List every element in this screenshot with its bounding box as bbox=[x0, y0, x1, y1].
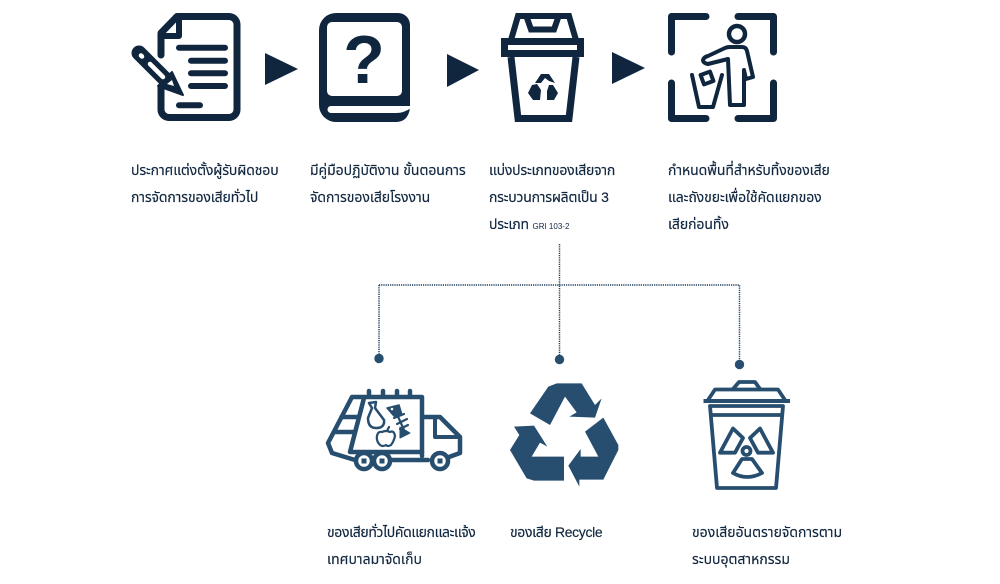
text: general waste bbox=[327, 524, 476, 567]
text: step 1 announcement: การจัดการของเสียทั่วไป bbox=[131, 189, 258, 205]
marker: general waste dot bbox=[374, 354, 384, 363]
text: step 4 designated area bbox=[668, 160, 830, 232]
connector: dotted tree bbox=[379, 244, 740, 364]
marker: hazardous dot bbox=[735, 360, 744, 369]
icon: manual book with question mark bbox=[319, 13, 411, 122]
text: step 4 designated area: และถังขยะเพื่อใช้คัดแยกของ bbox=[668, 189, 822, 205]
text: step 2 manual: มีคู่มือปฏิบัติงาน ขั้นตอนการ bbox=[310, 162, 466, 178]
text: step 3 classify: กระบวนการผลิตเป็น 3 bbox=[489, 189, 609, 205]
arrow: step 3 to 4 bbox=[612, 52, 645, 84]
text: general waste: เทศบาลมาจัดเก็บ bbox=[327, 551, 422, 567]
text: step 3 classify: ประเภท GRI 103-2 bbox=[489, 216, 569, 232]
arrow: step 2 to 3 bbox=[447, 54, 479, 87]
icon: document and pencil bbox=[139, 16, 237, 118]
marker: recycle dot bbox=[555, 355, 564, 364]
text: step 1 announcement bbox=[131, 162, 279, 205]
arrow: step 1 to 2 bbox=[265, 53, 298, 85]
text: step 3 classify: แบ่งประเภทของเสียจาก bbox=[489, 162, 615, 178]
text: hazardous waste: ระบบอุตสาหกรรม bbox=[692, 551, 790, 567]
text: hazardous waste: ของเสียอันตรายจัดการตาม bbox=[692, 524, 842, 540]
text: hazardous waste bbox=[692, 524, 842, 568]
text: step 4 designated area: เสียก่อนทิ้ง bbox=[668, 216, 729, 232]
icon: large recycle symbol bbox=[510, 383, 618, 487]
icon: manual book with question mark: ? bbox=[343, 22, 385, 98]
text: step 4 designated area: กำหนดพื้นที่สำหรับทิ้งของเสีย bbox=[668, 162, 830, 178]
icon: person throwing trash in frame bbox=[672, 16, 774, 118]
text: general waste: ของเสียทั่วไปคัดแยกและแจ้ง bbox=[327, 524, 475, 540]
icon: recycling bin bbox=[504, 16, 580, 118]
icon: garbage truck with food waste bbox=[328, 391, 460, 469]
text: step 1 announcement: ประกาศแต่งตั้งผู้รับผิดชอบ bbox=[131, 162, 279, 178]
text: recycle waste: ของเสีย Recycle bbox=[510, 524, 602, 540]
icon: hazardous waste bin bbox=[704, 382, 790, 488]
text: step 2 manual bbox=[310, 162, 466, 205]
text: step 2 manual: จัดการของเสียโรงงาน bbox=[310, 189, 430, 205]
text: step 3 classify bbox=[489, 162, 615, 232]
